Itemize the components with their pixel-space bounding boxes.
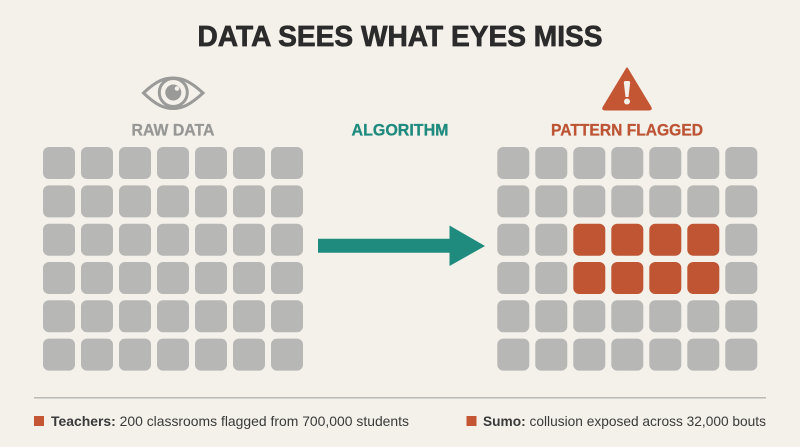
heading: algorithm: ALGORITHM <box>352 122 448 140</box>
grid: pattern flagged <box>497 147 757 371</box>
arrow: algorithm <box>318 226 485 266</box>
footnote: sumo: Sumo: collusion exposed across 32,000 bouts <box>483 413 766 429</box>
icon: eye <box>144 78 203 108</box>
footnote: teachers: Teachers: 200 classrooms flagged from 700,000 students <box>51 413 409 429</box>
heading: pattern flagged: PATTERN FLAGGED <box>551 122 703 140</box>
grid: raw data <box>43 147 303 371</box>
heading: raw data: RAW DATA <box>132 122 215 140</box>
title: DATA SEES WHAT EYES MISS <box>198 21 602 53</box>
icon: warning triangle <box>603 68 651 110</box>
